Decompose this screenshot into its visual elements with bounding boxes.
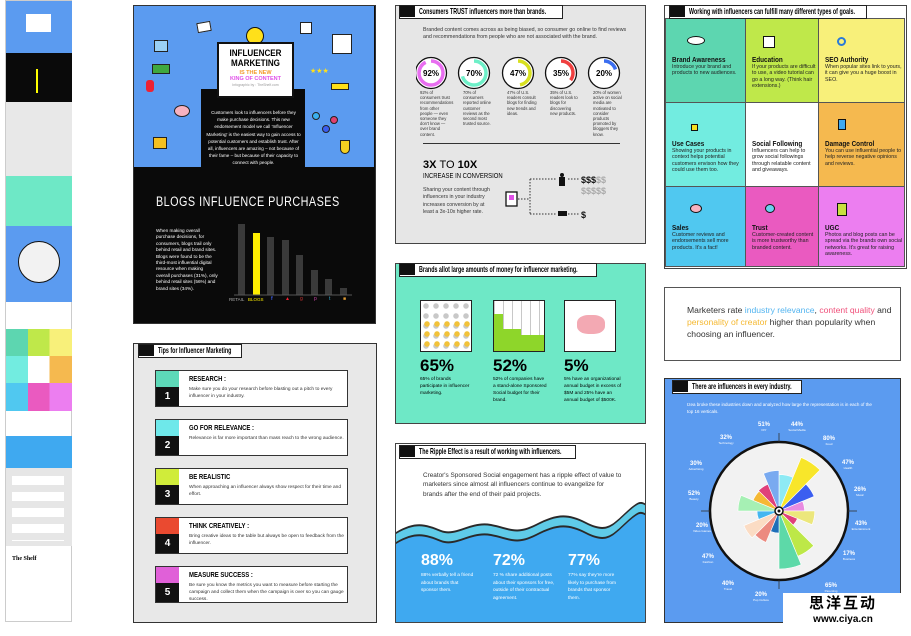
title box (217, 42, 294, 98)
tip 3 (155, 468, 348, 505)
donut charts (416, 56, 620, 90)
goal: brand awareness (665, 18, 746, 103)
icons (687, 36, 705, 45)
tip 5 (155, 566, 348, 603)
tip 4: THINK CREATIVELY : (189, 523, 249, 530)
wheel labels: 26% (854, 487, 867, 493)
wheel labels: 32% (720, 435, 733, 441)
heading tab (399, 445, 576, 459)
heading: blogs influence purchases: BLOGS INFLUENCE PURCHASES (156, 194, 340, 209)
donut charts: 47% (510, 69, 526, 78)
tip 4 (155, 517, 348, 554)
wheel labels: 17% (843, 551, 856, 557)
chart: polar wheel: Social Media (788, 428, 806, 432)
panel: tips for influencer marketing (133, 343, 377, 623)
panel: hero influencer marketing: BLOGS (248, 297, 264, 302)
stat 52%: 52% (493, 356, 527, 375)
panel: goals grid (664, 5, 907, 269)
goal: trust: Trust (752, 223, 768, 232)
panel: influencers in every industry (664, 378, 901, 623)
panel: consumers trust influencers: INCREASE IN CONVERSION (423, 173, 503, 180)
heading tab (672, 380, 802, 394)
thumbnail strip: full infographic preview (5, 0, 72, 622)
goal: damage control (818, 102, 905, 187)
goal: seo: When popular sites link to yours, it can give you a huge boost in SEO. (825, 64, 902, 83)
donut charts: 70% (466, 69, 482, 78)
panel: ripple effect: 88% verbally tell a friend about brands that sponsor them. (421, 573, 473, 593)
conversion diagram: $$$$$ (581, 175, 606, 185)
panel: hero influencer marketing: f (271, 296, 273, 302)
intro text: Branded content comes across as being biased, so consumer go online to find reviews and recommendations from people who are not associated with the brand. (423, 27, 626, 40)
stat 72%: 72% (493, 552, 525, 569)
goal: sales (665, 186, 746, 267)
goal: education: Education (752, 55, 783, 64)
goal: damage control: You can use influential people to help reverse negative opinions and reviews. (825, 148, 901, 167)
conversion diagram: $ (581, 210, 586, 220)
title box: KING OF CONTENT (230, 76, 281, 82)
tip 5: 5 (165, 587, 170, 598)
stat 5%: 5% (564, 356, 589, 375)
heading tab (138, 344, 242, 358)
tip 1 (155, 370, 348, 407)
icon box: people (420, 300, 472, 352)
panel: consumers trust influencers: 47% of U.S. readers consult blogs for finding new trends and ideas. (507, 90, 537, 116)
icon: crown badge (246, 27, 264, 45)
tip 5: Be sure you know the metrics you want to measure before starting the campaign and collect them when the campaign is over so you can gauge success. (189, 583, 344, 602)
wheel labels: 80% (823, 436, 836, 442)
chart: polar wheel: Music (856, 493, 864, 497)
chart: polar wheel: DIY (761, 428, 767, 432)
thumb: hero (6, 1, 72, 53)
wheel labels: 47% (702, 554, 715, 560)
panel: brands allot money: 65% of brands participate in influencer marketing. (420, 377, 469, 396)
tip 2: GO FOR RELEVANCE : (189, 425, 254, 432)
chart: polar wheel: Health (844, 466, 853, 470)
panel: hero influencer marketing (133, 5, 376, 324)
wheel labels: 20% (696, 523, 709, 529)
goal: use cases: Showing your products in context helps potential customers envison how they could use them too. (672, 148, 739, 173)
panel: consumers trust influencers: Sharing your content through influencers in your industry increases conversion by at least a 3x-10x higher rate. (423, 187, 490, 215)
title box: Infographic by : TheShelf.com (232, 83, 279, 87)
heading tab (399, 263, 597, 277)
panel: brands allot money (395, 263, 646, 424)
bar chart (234, 224, 352, 296)
title box: MARKETING (231, 58, 280, 69)
thumb: ripple (6, 436, 72, 468)
waves (396, 502, 645, 622)
panel: hero influencer marketing: g (300, 296, 303, 302)
heading: 3x to 10x: 3X TO 10X (423, 159, 477, 171)
panel: consumers trust influencers: 70% of consumers reported online customer reviews as the second most trusted source. (463, 90, 491, 126)
tip 3: When approaching an influencer always show respect for their time and effort. (189, 485, 341, 497)
icon box: money grid (493, 300, 545, 352)
panel: ripple effect: 77% say they're more likely to purchase from brands that sponsor them. (568, 573, 616, 600)
chart: polar wheel: Entertainment (852, 527, 870, 531)
goal: trust (745, 186, 819, 267)
blue sky (134, 6, 374, 167)
heading tab (669, 5, 867, 19)
tip 3: BE REALISTIC (189, 474, 230, 481)
donut charts: 20% (596, 69, 612, 78)
tip 3: 3 (165, 489, 170, 500)
stat 77%: 77% (568, 552, 600, 569)
donut captions: 92% of consumers trust recommendations from other people — even someone they don't know — over brand content. (420, 90, 453, 137)
chart: polar wheel: Fashion (703, 560, 714, 564)
goal: social following: Social Following (752, 139, 802, 148)
panel: hero influencer marketing: p (314, 296, 317, 302)
panel: hero influencer marketing: t (329, 296, 330, 302)
heading tab (399, 5, 563, 19)
heading tab: The Ripple Effect is a result of working with influencers. (419, 446, 562, 456)
tip 4: 4 (165, 538, 170, 549)
panel: ripple effect (395, 443, 646, 623)
tip 1: RESEARCH : (189, 376, 226, 383)
panel: brands allot money: 5% have an organizational annual budget in excess of $5M and 25% have an annual budget of $500K. (564, 377, 621, 403)
stat 88%: 88% (421, 552, 453, 569)
thumb: shelf: The Shelf (12, 556, 37, 562)
goal: education (745, 18, 819, 103)
panel: marketers rate (664, 287, 901, 361)
chart: polar wheel: Pop Culture (753, 598, 769, 602)
panel: brands allot money: 52% of companies have a stand-alone Sponsored Social budget for their brand. (493, 377, 547, 403)
thumb: goals (6, 329, 72, 411)
title box: INFLUENCER (229, 48, 282, 59)
heading tab: Consumers TRUST influencers more than brands. (419, 6, 546, 16)
goal: ugc (818, 186, 905, 267)
wheel labels: 47% (842, 460, 855, 466)
goal: use cases: Use Cases (672, 139, 704, 148)
goal: sales: Sales (672, 223, 689, 232)
thumb: industries (6, 226, 72, 302)
goal: seo (818, 18, 905, 103)
chart: polar wheel: Beauty (689, 497, 699, 501)
panel: hero influencer marketing: ▲ (285, 296, 290, 302)
thumb: tips (6, 468, 72, 546)
stat 65%: 65% (420, 356, 454, 375)
chart: polar wheel: Business (843, 557, 856, 561)
tip 4: Bring creative ideas to the table but always be open to feedback from the influencer. (189, 534, 344, 546)
goal: social following (745, 102, 819, 187)
wheel labels: 65% (825, 583, 838, 589)
panel: marketers rate: Marketers rate industry relevance, content quality and personality of creator higher than popularity when choosing an influencer. (687, 305, 891, 339)
goal: brand awareness: Brand Awareness (672, 55, 726, 64)
tip 2: Relevance is far more important than mass reach to the wrong audience. (189, 436, 344, 441)
goal: damage control: Damage Control (825, 139, 874, 148)
panel: consumers trust influencers (395, 5, 646, 244)
panel: hero influencer marketing: ★★★ (310, 68, 329, 75)
heading tab: Brands allot large amounts of money for influencer marketing. (419, 264, 578, 274)
wheel labels: 52% (688, 491, 701, 497)
chart: polar wheel: Travel (724, 587, 732, 591)
tip 5: MEASURE SUCCESS : (189, 572, 253, 579)
goal: brand awareness: Introduce your brand and products to new audiences. (672, 64, 736, 76)
tip 1: Make sure you do your research before blasting out a pitch to every influencer in your industry. (189, 387, 332, 399)
panel: ripple effect: 72 % share additional posts about their sponsors for free, outside of their contractual agreement. (493, 573, 554, 600)
chart: polar wheel (688, 422, 870, 602)
intro text: Creator's Sponsored Social engagement has a ripple effect of value to marketers since almost all influencers continue to evangelize for brands after the end of their paid projects. (423, 472, 621, 498)
chart: polar wheel: Video Games (693, 529, 712, 533)
panel: hero influencer marketing: RETAIL (229, 297, 244, 302)
watermark: 思洋互动 (809, 595, 877, 612)
wheel labels (688, 422, 868, 598)
wheel labels: 51% (758, 422, 771, 428)
donut charts: 92% (423, 69, 439, 78)
tip 2: 2 (165, 440, 170, 451)
chart: polar wheel: Advertising (689, 467, 704, 471)
wheel labels: 44% (791, 422, 804, 428)
goal: social following: Influencers can help to grow social followings through relatable content and giveaways. (752, 148, 811, 173)
chart: polar wheel: Food (826, 442, 833, 446)
panel: consumers trust influencers: 35% of U.S. readers look to blogs for discovering new products. (550, 90, 578, 116)
thumb: money (6, 176, 72, 226)
title box: IS THE NEW (239, 70, 272, 76)
watermark: www.ciya.cn (813, 614, 873, 625)
watermark (783, 593, 903, 633)
goal: ugc: Photos and blog posts can be spread via the brands own social networks. It's great for raising awareness. (825, 232, 902, 257)
conversion diagram: $$$$$ (581, 186, 606, 196)
tip 1: 1 (165, 391, 170, 402)
heading tab: Tips for Influencer Marketing (158, 345, 231, 355)
conversion diagram (505, 173, 606, 220)
panel: consumers trust influencers: 20% of women active on social media are motivated to consider products promoted by bloggers they know. (593, 90, 622, 137)
panel: hero influencer marketing: ■ (343, 296, 346, 302)
text: blogs: When making overall purchase decisions, for consumers, blogs trail only behind retail and brand sites. Blogs were found to be the third-most influential digital resource when making overall purchases (31%), only behind retail sites (56%) and brand sites (34%). (156, 228, 218, 291)
intro text: Customers look to influencers before they make purchase decisions. This new endorsement model we call 'Influencer Marketing' is the easiest way to gain access to potential customers and establish trust. After all, influencers are amazing – not because of their fame – but because of their capacity to connect with people. (206, 110, 301, 165)
goal: use cases (665, 102, 746, 187)
wheel labels: 43% (855, 521, 868, 527)
goal: sales: Customer reviews and endorsements sell more products. It's a fact! (672, 232, 729, 251)
thumb: trust (6, 102, 72, 176)
wheel labels: 40% (722, 581, 735, 587)
icon box: piggy bank (564, 300, 616, 352)
black center tab (201, 89, 305, 169)
donut charts: 35% (553, 69, 569, 78)
icons scattered (154, 40, 168, 52)
intro text: Izea broke these industries down and analyzed how large the representation is in each of the top 16 verticals. (687, 402, 872, 414)
wheel labels: 20% (755, 592, 768, 598)
goal: ugc: UGC (825, 223, 839, 232)
heading tab: Working with influencers can fulfill many different types of goals. (689, 6, 855, 16)
heading tab: There are influencers in every industry. (692, 381, 792, 391)
divider (423, 143, 620, 144)
tip 2 (155, 419, 348, 456)
chart: polar wheel: Parenting (825, 589, 838, 593)
wheel labels: 30% (690, 461, 703, 467)
goal: education: If your products are difficult to use, a video tutorial can go a long way. (Think hair extensions.) (752, 64, 816, 89)
goal: seo: SEO Authority (825, 55, 868, 64)
goal: trust: Customer-created content is more trustworthy than branded content. (752, 232, 813, 251)
chart: polar wheel: Technology (718, 441, 734, 445)
